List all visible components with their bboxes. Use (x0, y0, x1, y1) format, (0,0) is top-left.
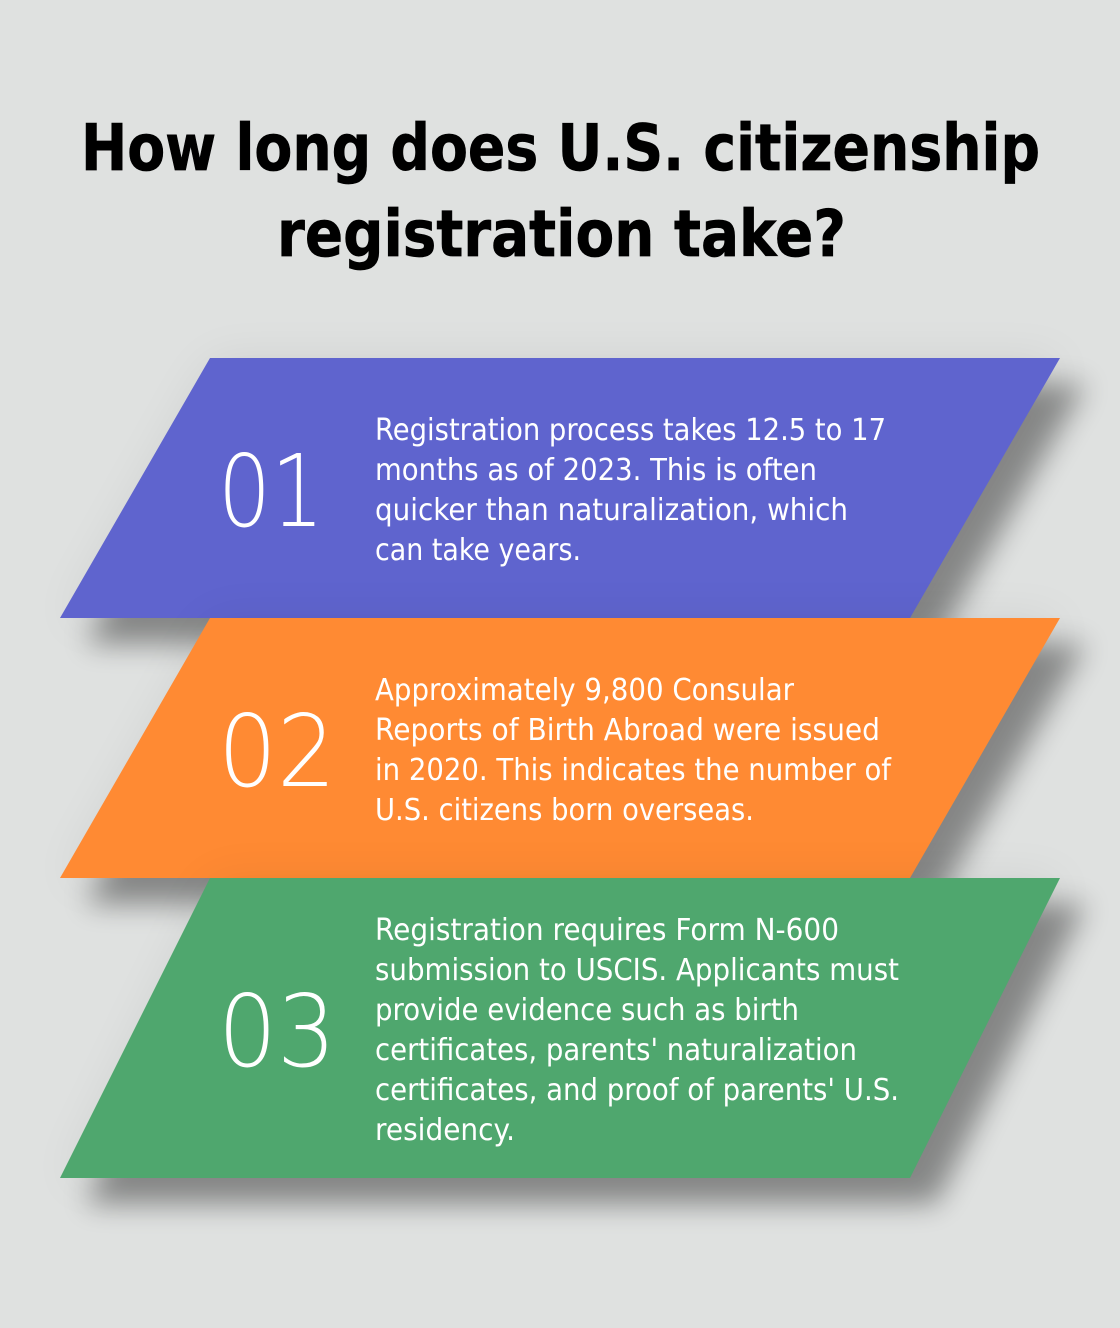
panel: step 03 (60, 878, 1086, 1204)
title (81, 112, 1040, 272)
text: step 01: quicker than naturalization, which (375, 493, 848, 528)
text: step 03 (375, 913, 899, 1148)
text: step 03: Registration requires Form N-600 (375, 913, 839, 948)
text: step 03: residency. (375, 1113, 515, 1148)
number 01: 01 (218, 433, 324, 550)
text: step 02 (375, 673, 892, 828)
text: step 01: can take years. (375, 533, 581, 568)
text: step 01: Registration process takes 12.5 to 17 (375, 413, 886, 448)
text: step 01 (375, 413, 886, 568)
text: step 03: provide evidence such as birth (375, 993, 799, 1028)
text: step 02: Approximately 9,800 Consular (375, 673, 795, 708)
text: step 01: months as of 2023. This is often (375, 453, 817, 488)
number 02: 02 (218, 693, 336, 810)
text: step 03: certificates, parents' naturalization (375, 1033, 857, 1068)
text: step 03: submission to USCIS. Applicants must (375, 953, 899, 988)
number 03: 03 (218, 973, 336, 1090)
title: registration take? (277, 198, 846, 272)
panel: step 02 (60, 618, 1086, 904)
panel: step 01 (60, 358, 1086, 644)
text: step 02: in 2020. This indicates the number of (375, 753, 892, 788)
text: step 03: certificates, and proof of parents' U.S. (375, 1073, 899, 1108)
text: step 02: Reports of Birth Abroad were issued (375, 713, 880, 748)
text: step 02: U.S. citizens born overseas. (375, 793, 754, 828)
